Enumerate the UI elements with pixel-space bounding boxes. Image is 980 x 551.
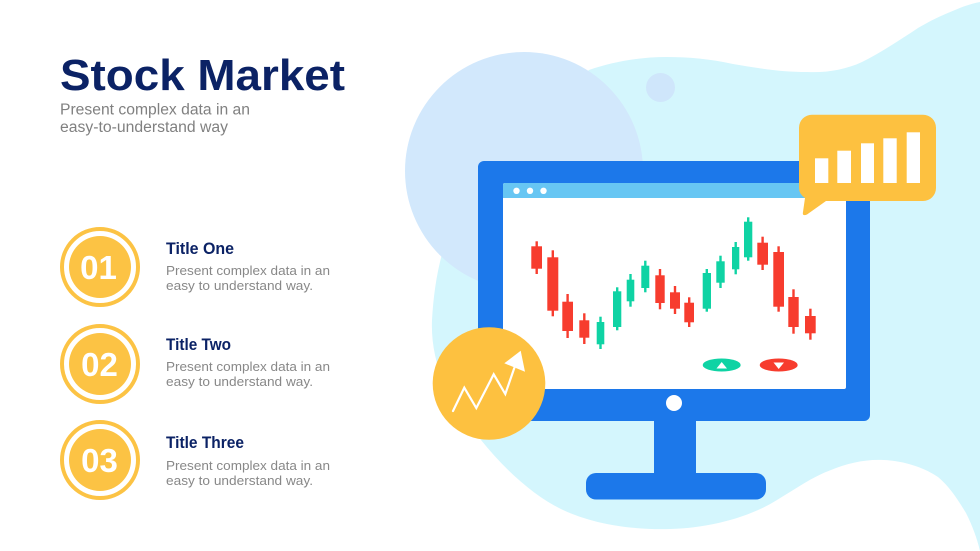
item 01 text — [166, 263, 330, 293]
badge 02: 02 — [81, 346, 118, 383]
subtitle — [60, 102, 250, 136]
item 03 title: Title Three — [166, 434, 244, 452]
badge 01: 01 — [80, 249, 117, 286]
item 01 text: Present complex data in an — [166, 263, 330, 278]
item 03 text: easy to understand way. — [166, 473, 313, 488]
monitor frame — [478, 161, 870, 421]
monitor — [478, 161, 870, 500]
badge 02 — [62, 326, 138, 402]
badge 03: 03 — [81, 442, 118, 479]
rising line — [453, 368, 514, 411]
growth badge — [433, 327, 545, 440]
title: Stock Market — [60, 51, 345, 100]
item 01 title: Title One — [166, 240, 234, 258]
background blob — [432, 2, 980, 551]
item 02 title: Title Two — [166, 336, 231, 354]
up button — [703, 358, 741, 372]
speech bubble bar chart — [799, 115, 936, 215]
subtitle: Present complex data in an — [60, 102, 250, 118]
item 03 — [62, 422, 330, 498]
browser dots — [513, 188, 547, 194]
badge circle — [433, 327, 545, 440]
item 02 text: easy to understand way. — [166, 374, 313, 389]
badge 03 — [62, 422, 138, 498]
background circle — [405, 52, 643, 290]
browser bar — [503, 183, 846, 198]
bubble — [799, 115, 936, 215]
item 01 — [62, 229, 330, 305]
item 01 text: easy to understand way. — [166, 278, 313, 293]
subtitle: easy-to-understand way — [60, 119, 228, 136]
green candles — [597, 217, 752, 349]
item 02 — [62, 326, 330, 402]
badge 01 — [62, 229, 138, 305]
power button — [666, 395, 682, 411]
monitor stand — [654, 418, 696, 476]
item 02 text — [166, 359, 330, 389]
item 02 text: Present complex data in an — [166, 359, 330, 374]
down button — [760, 358, 798, 372]
small decorative circle — [646, 73, 675, 102]
item 03 text — [166, 458, 330, 488]
red candles — [531, 237, 816, 344]
bars — [815, 132, 920, 183]
screen — [503, 183, 846, 389]
arrow head — [504, 351, 525, 372]
item 03 text: Present complex data in an — [166, 458, 330, 473]
monitor base — [586, 473, 766, 500]
candlestick chart — [531, 217, 816, 372]
